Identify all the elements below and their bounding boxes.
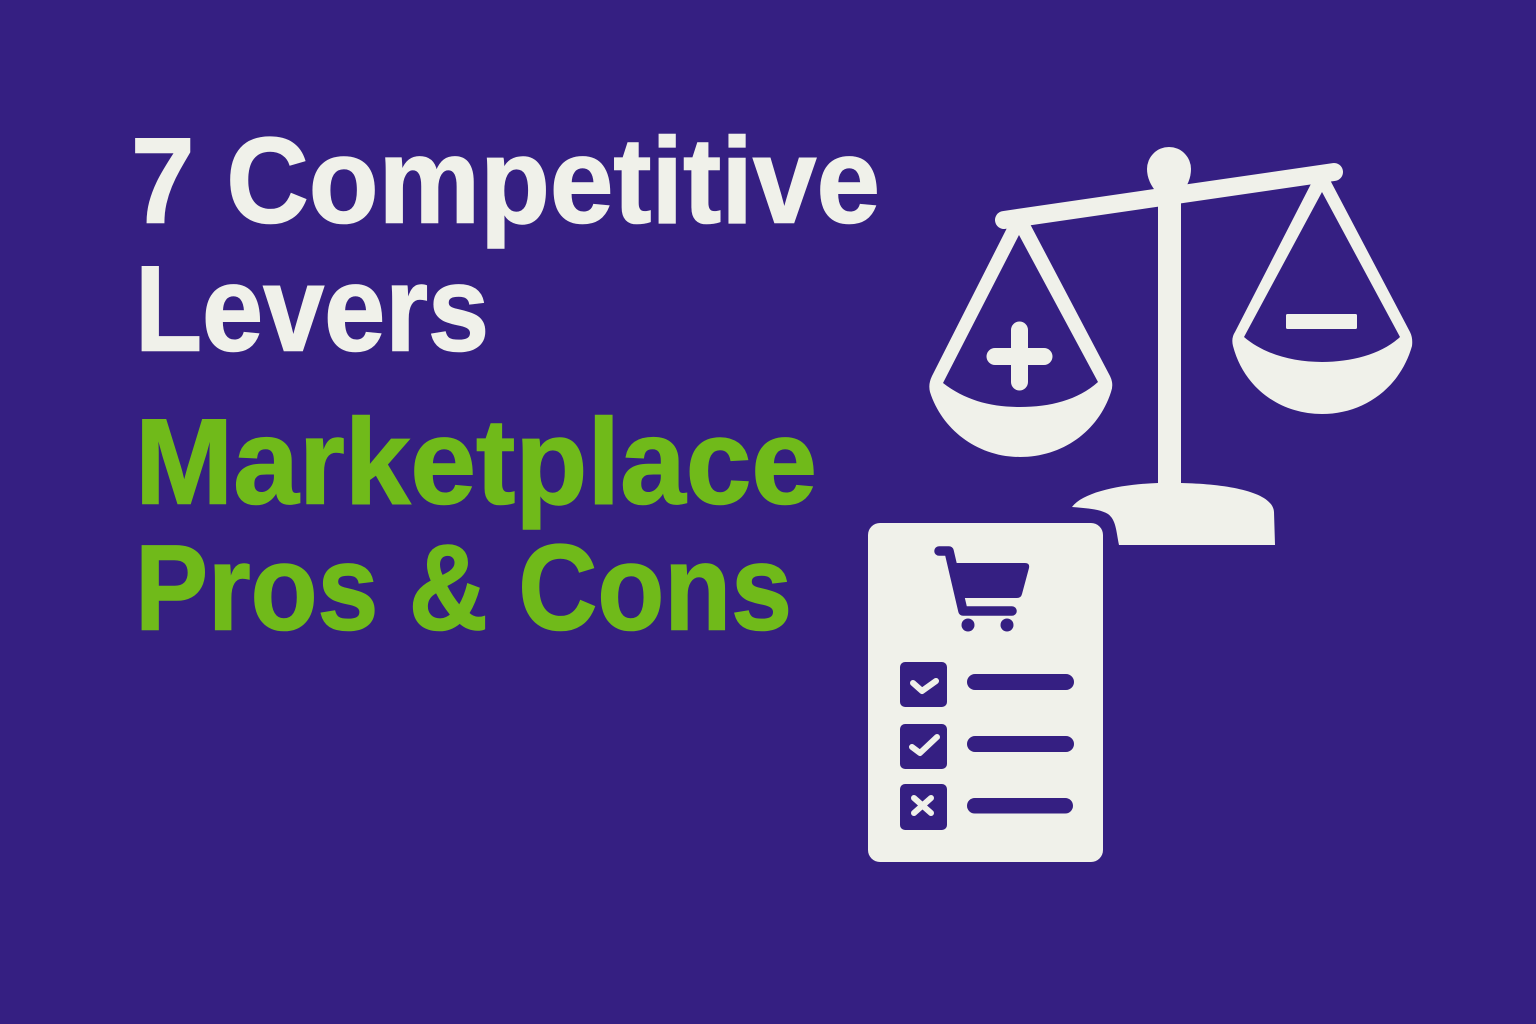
right pan with minus bbox=[1232, 178, 1412, 414]
panel: marketplace checklist card bbox=[868, 523, 1103, 862]
icon: balance scale bbox=[929, 147, 1412, 545]
left pan with plus bbox=[929, 222, 1112, 457]
scale pillar bbox=[1158, 180, 1181, 490]
icon: shopping cart bbox=[939, 551, 1029, 632]
subtitle: Marketplace Pros & Cons bbox=[135, 393, 817, 655]
title: 7 Competitive Levers: 7 Competitive bbox=[131, 112, 880, 248]
subtitle: Marketplace Pros & Cons: Marketplace bbox=[135, 393, 817, 529]
checklist row 3: crossed bbox=[900, 784, 1073, 830]
minus sign bbox=[1286, 314, 1357, 329]
title: 7 Competitive Levers bbox=[131, 112, 880, 376]
title: 7 Competitive Levers: Levers bbox=[135, 240, 489, 376]
scale pivot ball bbox=[1147, 147, 1191, 194]
checklist row 2: checked bbox=[900, 724, 1074, 769]
plus sign bbox=[986, 322, 1052, 390]
scale base bbox=[1072, 483, 1275, 545]
scale beam bbox=[1004, 172, 1334, 220]
checklist row 1: checked bbox=[900, 662, 1074, 707]
subtitle: Marketplace Pros & Cons: Pros & Cons bbox=[135, 519, 792, 655]
